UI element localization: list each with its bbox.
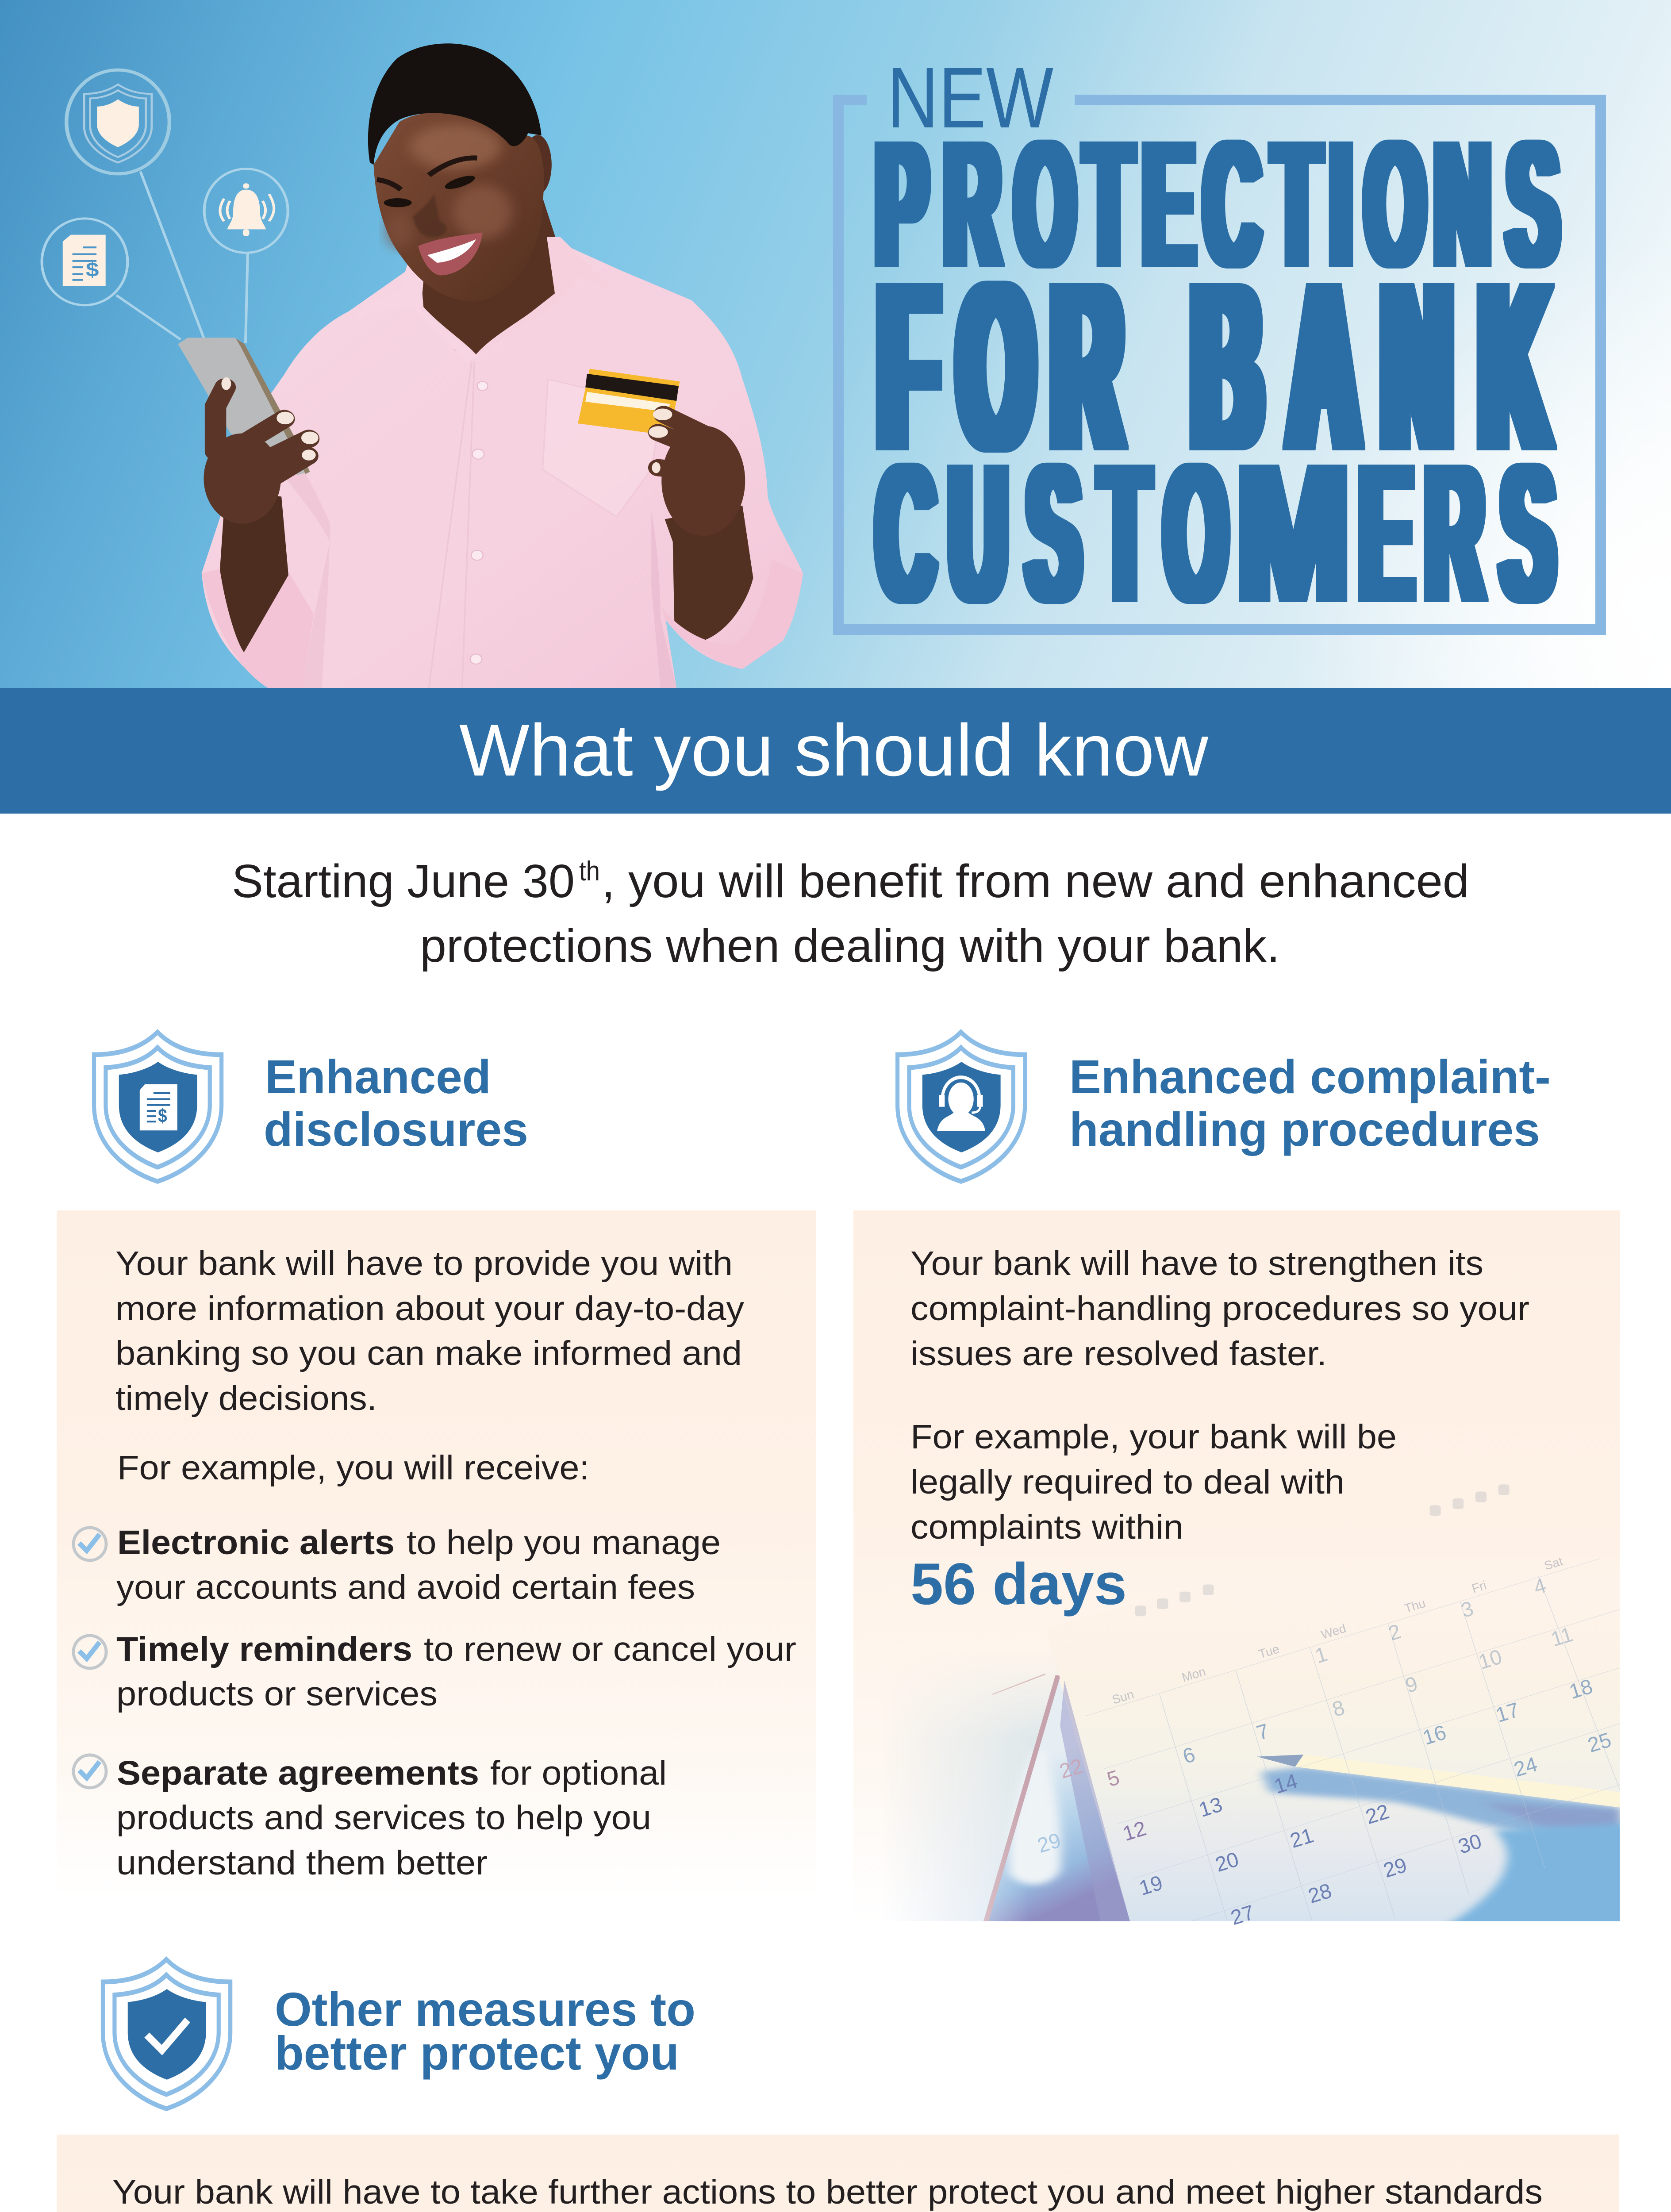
band: What you should know — [0, 688, 1671, 814]
shirt — [202, 237, 803, 688]
head — [368, 43, 552, 302]
calendar photo — [853, 1472, 1642, 1934]
check: electronic alerts: your accounts and avoid certain fees — [116, 1568, 695, 1606]
calendar dates: 1 — [1312, 1642, 1330, 1667]
calendar weekday labels — [1110, 1554, 1564, 1707]
calendar dates: 30 — [1455, 1829, 1484, 1858]
photo: woman holding phone and bank card — [42, 43, 803, 688]
band: What you should know: What you should know — [459, 710, 1209, 791]
hand with card — [649, 408, 745, 536]
panel text: intro: Your bank will have to take further actions to better protect you and meet higher standards — [112, 2173, 1543, 2211]
intro text: , you will benefit from new and enhanced — [602, 855, 1469, 907]
panel: complaint handling — [853, 1210, 1642, 1934]
calendar rings — [1135, 1484, 1510, 1616]
title: NEW PROTECTIONS FOR BANK CUSTOMERS: FOR BANK — [879, 234, 1548, 499]
calendar dates: 29 — [1034, 1828, 1064, 1857]
panel: other measures — [57, 2135, 1619, 2212]
calendar dates: 10 — [1475, 1644, 1505, 1674]
pencil — [1257, 1755, 1620, 1807]
panel text: complaint handling: Your bank will have to strengthen its — [910, 1244, 1483, 1283]
connector lines from phone to icons — [116, 172, 248, 343]
check: electronic alerts — [73, 1524, 721, 1606]
icon: shield with document: $ — [158, 1106, 167, 1126]
panel text: complaint handling: For example, your bank will be — [910, 1418, 1397, 1456]
panel: enhanced disclosures — [57, 1210, 816, 1901]
calendar dates: 4 — [1531, 1573, 1548, 1599]
calendar dates: 11 — [1548, 1622, 1575, 1651]
forearm right — [665, 506, 753, 641]
calendar dates — [1034, 1573, 1614, 1929]
panel text: intro paragraph: more information about your day-to-day — [115, 1290, 745, 1328]
check: electronic alerts: Electronic alerts — [117, 1524, 395, 1562]
icon: document with dollar sign — [42, 219, 127, 305]
calendar weekday labels: Sun — [1110, 1687, 1136, 1707]
credit card — [578, 369, 680, 436]
calendar dates: 14 — [1271, 1769, 1300, 1798]
calendar dates: 6 — [1180, 1742, 1198, 1768]
check: separate agreements — [73, 1754, 667, 1882]
calendar weekday labels: Mon — [1180, 1664, 1207, 1685]
check: electronic alerts: to help you manage — [407, 1524, 721, 1562]
panel text: intro paragraph: timely decisions. — [115, 1379, 377, 1417]
icon: shield with checkmark — [103, 1959, 230, 2108]
calendar dates: 17 — [1493, 1697, 1522, 1727]
title: NEW PROTECTIONS FOR BANK CUSTOMERS: M — [1237, 425, 1349, 642]
calendar dates: 22 — [1056, 1754, 1086, 1783]
icon: shield — [66, 70, 169, 174]
phone — [178, 338, 310, 475]
calendar weekday labels: Sat — [1543, 1554, 1564, 1573]
calendar grid — [1086, 1559, 1620, 1921]
calendar weekday labels: Tue — [1257, 1642, 1281, 1661]
heading: Other measures to better protect you — [275, 1982, 695, 2080]
calendar dates: 21 — [1287, 1823, 1316, 1852]
calendar dates: 13 — [1196, 1792, 1225, 1821]
title: NEW PROTECTIONS FOR BANK CUSTOMERS: CUSTO — [877, 425, 1227, 642]
hand with phone — [204, 377, 319, 524]
panel text: complaint handling: legally required to deal with — [910, 1463, 1344, 1501]
intro text — [232, 855, 1469, 972]
panel text: complaint handling: issues are resolved faster. — [910, 1335, 1327, 1373]
check: separate agreements: products and services to help you — [116, 1799, 651, 1837]
calendar dates: 28 — [1305, 1878, 1334, 1908]
calendar weekday labels: Wed — [1319, 1621, 1348, 1642]
check: separate agreements: Separate agreements — [117, 1754, 479, 1792]
title frame — [838, 100, 1601, 630]
calendar dates: 25 — [1585, 1728, 1614, 1757]
hero banner — [0, 0, 1671, 688]
heading: Enhanced disclosures — [264, 1050, 528, 1156]
rolled sleeve left — [202, 569, 314, 688]
woman figure — [178, 43, 803, 688]
panel text: intro paragraph: For example, you will receive: — [117, 1449, 589, 1487]
check: timely reminders — [73, 1630, 796, 1713]
intro text: protections when dealing with your bank. — [420, 920, 1280, 972]
check: timely reminders: to renew or cancel your — [424, 1630, 796, 1668]
forearm left — [219, 492, 289, 652]
calendar dates: 3 — [1458, 1596, 1476, 1622]
calendar dates: 24 — [1511, 1752, 1540, 1781]
panel text: complaint handling: complaint-handling procedures so your — [910, 1290, 1529, 1328]
calendar dates: 7 — [1254, 1719, 1271, 1744]
check: separate agreements: for optional — [490, 1754, 667, 1792]
heading: Other measures to better protect you: better protect you — [275, 2026, 679, 2080]
calendar dates: 19 — [1136, 1870, 1165, 1900]
calendar dates: 22 — [1363, 1799, 1392, 1828]
calendar dates: 29 — [1380, 1853, 1410, 1882]
heading: Enhanced complaint-handling procedures: Enhanced complaint- — [1069, 1050, 1551, 1103]
title: NEW PROTECTIONS FOR BANK CUSTOMERS — [876, 50, 1558, 642]
heading: Enhanced complaint-handling procedures: handling procedures — [1069, 1102, 1540, 1156]
heading: Enhanced complaint-handling procedures — [1069, 1050, 1551, 1156]
calendar dates: 18 — [1566, 1674, 1595, 1703]
icon: document with dollar sign: $ — [86, 258, 99, 281]
panel text: intro paragraph: Your bank will have to provide you with — [115, 1244, 733, 1283]
neck — [421, 194, 557, 354]
intro text: th — [579, 856, 600, 887]
heading: Other measures to better protect you: Other measures to — [275, 1982, 695, 2036]
calendar dates: 8 — [1329, 1695, 1347, 1721]
check: timely reminders: products or services — [116, 1675, 438, 1713]
intro text: Starting June 30 — [232, 855, 575, 907]
check: separate agreements: understand them better — [116, 1844, 488, 1882]
calendar weekday labels: Fri — [1470, 1578, 1488, 1596]
icon: shield with document — [94, 1032, 222, 1181]
heading: Enhanced disclosures: Enhanced — [265, 1050, 491, 1103]
title: NEW PROTECTIONS FOR BANK CUSTOMERS: PROTECTIONS — [876, 104, 1558, 303]
panel text: intro paragraph — [115, 1244, 745, 1487]
rolled sleeve right — [662, 560, 803, 669]
collar — [349, 264, 477, 361]
callout: 56 days: 56 days — [910, 1551, 1127, 1617]
panel text: intro paragraph: banking so you can make informed and — [115, 1334, 742, 1372]
title: NEW PROTECTIONS FOR BANK CUSTOMERS: ERS — [1360, 425, 1554, 642]
icon: shield with headset agent — [898, 1032, 1025, 1181]
calendar dates: 16 — [1420, 1720, 1449, 1749]
icon: bell — [204, 169, 288, 253]
calendar dates: 12 — [1120, 1816, 1149, 1845]
calendar dates: 27 — [1228, 1900, 1257, 1929]
calendar dates: 5 — [1104, 1765, 1122, 1791]
calendar dates: 20 — [1212, 1847, 1241, 1876]
panel text: complaint handling — [910, 1244, 1529, 1546]
title: NEW PROTECTIONS FOR BANK CUSTOMERS: NEW — [887, 50, 1053, 146]
shirt buttons — [454, 344, 488, 664]
heading: Enhanced disclosures: disclosures — [264, 1102, 528, 1156]
check: timely reminders: Timely reminders — [116, 1630, 412, 1668]
panel text: complaint handling: complaints within — [910, 1508, 1183, 1546]
calendar dates: 9 — [1402, 1671, 1420, 1697]
calendar weekday labels: Thu — [1403, 1596, 1427, 1616]
calendar dates: 2 — [1386, 1619, 1403, 1645]
